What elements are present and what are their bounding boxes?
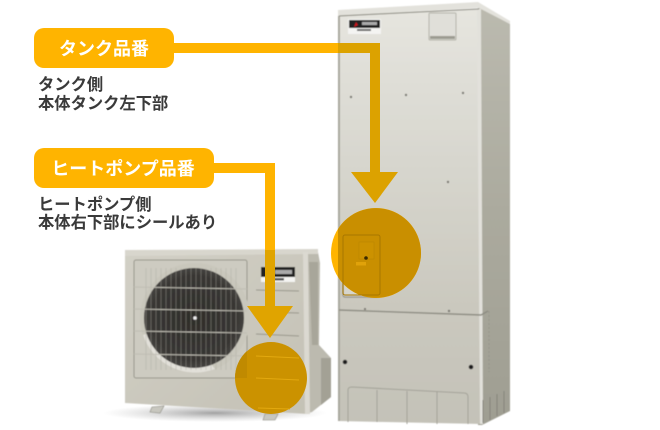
heat pump ground shadow (103, 404, 327, 422)
tank bolts (343, 360, 473, 369)
tank side panel (478, 6, 510, 425)
label: tank model number: タンク品番 (59, 39, 149, 59)
fan dark opening (144, 268, 244, 368)
fan hub (193, 316, 197, 320)
heat pump louvres (256, 290, 299, 336)
label: heat pump model number: ヒートポンプ品番 (51, 158, 195, 179)
tank front panel (338, 9, 482, 424)
tank side service panel (488, 311, 490, 372)
heat pump outdoor unit (125, 249, 331, 420)
heat pump logo badge (261, 267, 295, 282)
tank label door (343, 235, 380, 297)
label: heat pump model number (34, 148, 214, 188)
hot water tank unit (338, 2, 510, 425)
text: heat pump location: ヒートポンプ側 (38, 196, 151, 214)
tank top lid (338, 2, 510, 24)
tank upper access door (429, 13, 456, 40)
fan guard frame (134, 260, 247, 378)
fan shroud (140, 263, 250, 373)
heat pump pointer: line and arrow (214, 163, 293, 338)
heat pump feet (150, 406, 278, 420)
heat pump side bracket (309, 262, 318, 345)
heat pump side profile (305, 250, 331, 414)
text: tank location: 本体タンク左下部 (38, 95, 168, 113)
label: tank model number (34, 28, 174, 68)
text: tank location (38, 76, 168, 113)
fan grille (146, 268, 236, 370)
heat pump front body (125, 250, 308, 414)
tank bottom vents (348, 387, 468, 424)
tank lower panel seam (339, 310, 488, 315)
tank side vents (483, 391, 504, 423)
tank highlight circle (331, 208, 421, 298)
text: tank location: タンク側 (38, 76, 103, 94)
tank screws (350, 92, 464, 312)
heat pump highlight circle (235, 342, 307, 414)
text: heat pump location: 本体右下部にシールあり (38, 214, 217, 232)
tank logo badge (348, 19, 381, 34)
tank pointer: line and arrow (174, 43, 398, 203)
text: heat pump location (38, 196, 217, 232)
